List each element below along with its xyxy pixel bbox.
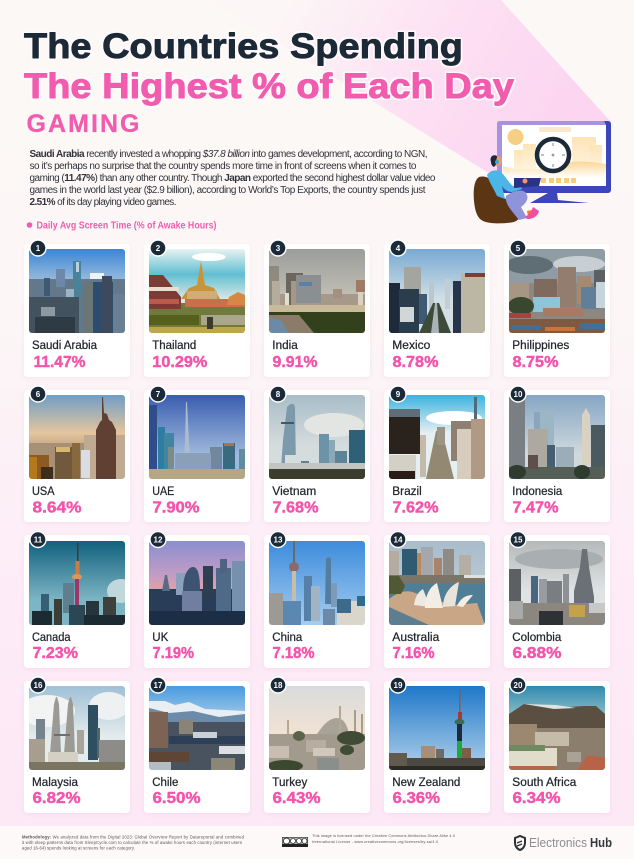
card: Australia <box>384 532 490 668</box>
card: Vietnam <box>264 386 370 522</box>
percentage: 7.23% <box>32 645 78 662</box>
percentage: 8.75% <box>512 354 558 371</box>
card: Philippines <box>504 240 610 377</box>
photo: London <box>149 541 245 625</box>
country name: China <box>272 630 302 644</box>
card: Turkey <box>264 677 370 813</box>
card: Malaysia <box>19 677 130 813</box>
intro paragraph: Saudi Arabia recently invested a whopping $37.8 billion into games development, according to NGN, <box>30 149 428 160</box>
photo: Cape Town <box>509 686 605 770</box>
percentage: 7.62% <box>392 500 438 516</box>
rank badge: 18 <box>274 681 283 690</box>
photo: Toronto <box>29 541 135 625</box>
rank badge: 8 <box>276 390 281 399</box>
logo: Electronics Hub: Hub <box>590 836 612 850</box>
photo: Istanbul <box>267 686 365 772</box>
card: Indonesia <box>504 386 610 522</box>
methodology note: aged 16-64) spends looking at screens for each category. <box>22 846 135 850</box>
rank badge: 7 <box>156 390 161 399</box>
photo: Riyadh <box>29 249 125 333</box>
methodology note <box>22 834 245 850</box>
methodology note: Methodology: We analyzed data from the Digital 2023: Global Overview Report by Datareportal and combined <box>22 834 245 840</box>
country name: Malaysia <box>32 775 78 789</box>
photo: Mexico City <box>389 249 485 333</box>
logo: Electronics Hub <box>515 836 612 850</box>
photo: Dubai <box>149 395 245 479</box>
rank badge: 17 <box>154 681 163 690</box>
photo: Santiago <box>149 686 245 770</box>
country name: Mexico <box>392 338 430 352</box>
rank badge: 3 <box>276 244 281 253</box>
rank badge: 14 <box>394 536 403 544</box>
icon: clock <box>537 139 569 171</box>
photo: Jakarta <box>508 395 605 479</box>
card: Thailand <box>144 240 250 377</box>
rank badge: 13 <box>274 536 283 544</box>
card: Mexico <box>384 240 490 377</box>
licence text: This image is licensed under the Creative Commons Attribution-Share Alike 4.0 <box>312 834 455 838</box>
rank badge: 10 <box>514 390 523 399</box>
percentage: 8.64% <box>32 500 82 516</box>
country name: UK <box>152 630 169 644</box>
photo: India skyline <box>269 249 365 333</box>
title line 1: The Countries Spending <box>24 27 463 66</box>
card: Brazil <box>384 386 490 522</box>
monitor <box>497 121 611 203</box>
photo: Bangkok temple <box>149 249 245 333</box>
photo: Manila <box>505 249 605 333</box>
country name: Australia <box>392 630 439 644</box>
percentage: 7.18% <box>272 645 314 662</box>
card: Canada <box>24 532 135 668</box>
photo: Auckland Sky Tower <box>389 686 485 770</box>
rank badge: 12 <box>154 536 163 544</box>
card: USA <box>24 386 130 522</box>
percentage: 7.68% <box>272 500 318 516</box>
percentage: 6.36% <box>392 790 440 807</box>
card: UK <box>144 532 250 668</box>
country name: Vietnam <box>272 484 316 498</box>
country name: Turkey <box>272 775 308 789</box>
intro paragraph: 2.51% of its day playing video games. <box>30 197 176 208</box>
card: India <box>264 240 370 377</box>
percentage: 6.82% <box>32 790 80 807</box>
card: UAE <box>144 386 250 522</box>
country name: Brazil <box>392 484 422 498</box>
rank badge: 4 <box>396 244 401 253</box>
country name: Thailand <box>152 338 196 352</box>
percentage: 6.43% <box>272 790 320 807</box>
photo: Sao Paulo <box>389 395 485 479</box>
photo: Bogota <box>509 541 605 625</box>
country name: New Zealand <box>392 775 460 789</box>
rank badge: 2 <box>156 244 161 253</box>
percentage: 6.50% <box>152 790 200 807</box>
icon: creative commons badge <box>282 837 308 847</box>
rank badge: 15 <box>514 536 523 544</box>
country name: India <box>272 338 298 352</box>
rank badge: 1 <box>36 244 41 253</box>
rank badge: 20 <box>514 681 523 690</box>
person on bean bag <box>474 155 541 223</box>
country name: Canada <box>32 630 71 644</box>
percentage: 7.90% <box>152 500 200 516</box>
photo: Kuala Lumpur <box>29 686 125 770</box>
subtitle: GAMING <box>26 110 140 138</box>
percentage: 7.19% <box>152 645 194 662</box>
card: Saudi Arabia <box>24 240 130 377</box>
percentage: 6.88% <box>512 645 562 662</box>
card: China <box>264 532 370 668</box>
country name: USA <box>32 484 55 498</box>
footer background <box>0 826 634 859</box>
rank badge: 9 <box>396 390 401 399</box>
title <box>24 27 515 106</box>
card: South Africa <box>504 677 610 813</box>
card: Chile <box>144 677 250 813</box>
rank badge: 6 <box>36 390 41 399</box>
legend: Daily Avg Screen Time (% of Awake Hours) <box>36 220 216 232</box>
card: Colombia <box>504 532 610 668</box>
intro paragraph: so it’s perhaps no surprise that the country spends more time in front of screens when it comes to <box>30 161 417 172</box>
rank badge: 19 <box>394 681 403 690</box>
intro paragraph <box>30 149 436 208</box>
percentage: 7.16% <box>392 645 434 662</box>
pink light beam <box>209 0 611 190</box>
photo: Ho Chi Minh City <box>269 395 365 479</box>
rank badge: 11 <box>34 536 43 544</box>
illustration: person gaming at monitor <box>474 121 611 223</box>
title line 2: The Highest % of Each Day <box>24 67 515 106</box>
intro paragraph: gaming (11.47%) than any other country. Though Japan exported the second highest dollar value video <box>30 173 436 184</box>
photo: Shanghai <box>269 541 365 625</box>
country name: Philippines <box>512 338 569 352</box>
card: New Zealand <box>384 677 490 813</box>
country name: South Africa <box>512 775 576 789</box>
percentage: 9.91% <box>272 354 318 371</box>
licence text <box>312 834 455 844</box>
methodology note: it with sleep patterns data from SleepCycle.com to calculate the % of awake hours each country (internet users <box>22 840 242 845</box>
country name: UAE <box>152 484 174 498</box>
rank badge: 5 <box>516 244 521 253</box>
percentage: 11.47% <box>34 354 86 371</box>
percentage: 8.78% <box>392 354 438 371</box>
rank badge: 16 <box>34 681 43 690</box>
licence text: International License - www.creativecommons.org/licenses/by-sa/4.0 <box>312 840 438 844</box>
percentage: 10.29% <box>152 354 207 371</box>
country name: Colombia <box>512 630 561 644</box>
country name: Indonesia <box>512 484 562 498</box>
country name: Chile <box>152 775 178 789</box>
photo: New York <box>29 395 125 479</box>
photo: Sydney Opera House <box>389 541 485 625</box>
percentage: 7.47% <box>512 500 558 516</box>
logo: Electronics Hub: Electronics <box>529 836 587 850</box>
country name: Saudi Arabia <box>32 338 97 352</box>
intro paragraph: games in the world last year ($2.9 billion), according to World’s Top Exports, the country spends just <box>30 185 426 196</box>
percentage: 6.34% <box>512 790 560 807</box>
